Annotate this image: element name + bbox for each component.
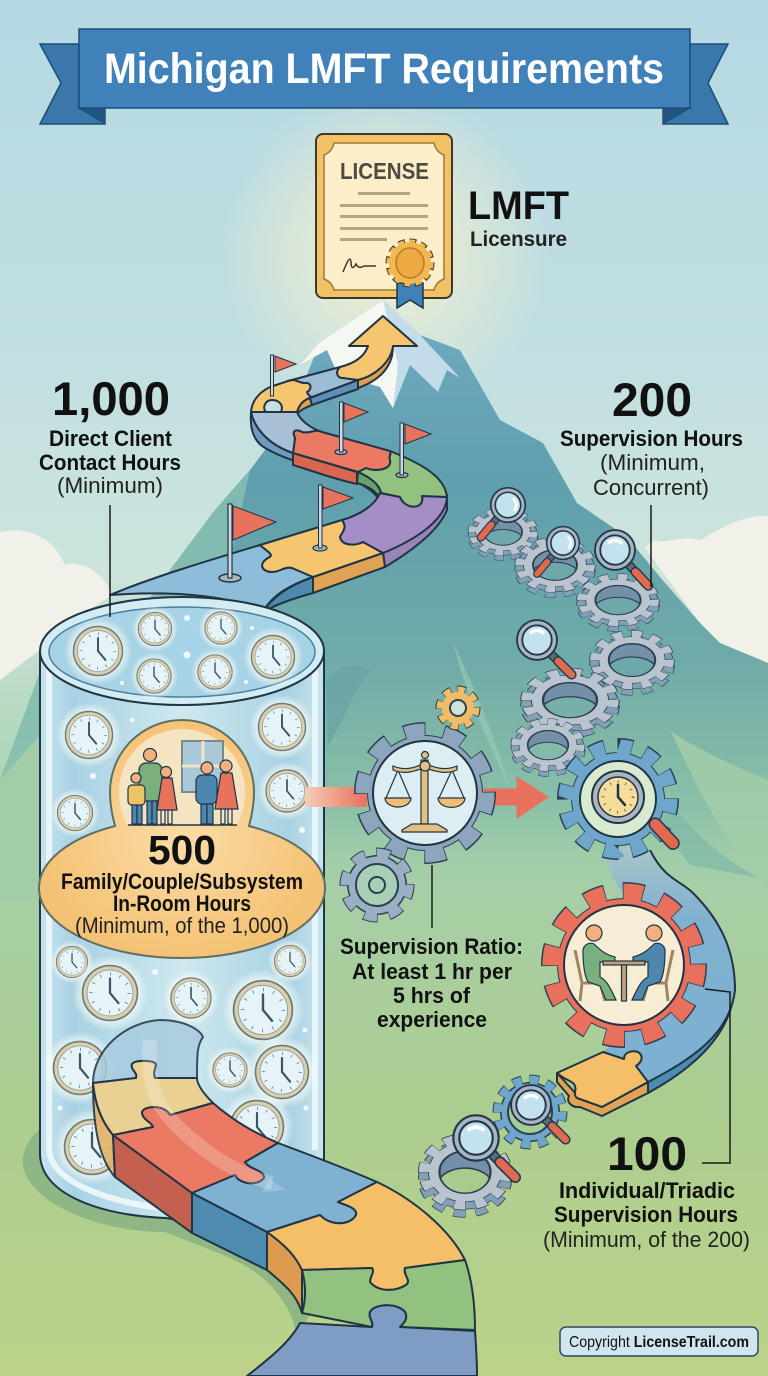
text: 1,000 direct client contact hours: Direct Client [49,426,173,451]
gear: small yellow [440,690,476,726]
icon: two people at table [575,925,673,1001]
puzzle piece: blue [192,1143,377,1232]
heading: LMFT Licensure: LMFT [468,184,569,228]
text: supervision ratio: 5 hrs of [393,983,471,1008]
side walls [93,1083,115,1177]
icon: balance scale [385,752,465,832]
gear: grey with magnifier [425,1106,535,1212]
arrow to license [337,316,417,380]
mountain [0,300,768,900]
glass cylinder of hours [40,597,324,1240]
heading: LMFT Licensure: Licensure [470,228,567,251]
text: 200 supervision hours: Concurrent) [593,475,709,500]
puzzle piece: orange right [557,1073,648,1116]
heading: LMFT Licensure [468,184,569,251]
text: 1,000 direct client contact hours: (Minimum) [57,473,163,498]
puzzle piece: blue start [110,545,313,612]
text: 200 supervision hours [560,373,743,500]
right blue path [557,846,735,1116]
text: 1,000 direct client contact hours: 1,000 [52,372,170,425]
gear: small grey [347,855,407,915]
lower puzzle path [93,1020,477,1376]
text: 500 hours: 500 [148,827,216,873]
title banner: Michigan LMFT Requirements [104,45,664,93]
text: 200 supervision hours: Supervision Hours [560,426,743,451]
icon: ribbon seal [389,242,431,308]
puzzle piece: pale blue [288,367,358,397]
puzzle piece: slate [251,412,322,453]
gear: clock magnifier [568,749,681,852]
puzzle piece: green [358,451,447,507]
text: 1,000 direct client contact hours: Contact Hours [39,450,181,475]
gear: individual supervision [554,895,694,1035]
text: 200 supervision hours: (Minimum, [600,450,705,475]
arrow: left bar into scale gear [305,787,367,807]
snow cap [300,300,460,408]
puzzle piece: red [113,1103,278,1193]
text: 1,000 direct client contact hours [39,372,181,498]
puzzle piece: green [302,1260,475,1330]
text: 100 individual triadic supervision [543,1127,750,1252]
leader lines [110,505,730,1163]
copyright badge [560,1327,758,1356]
puzzle piece: orange [260,520,383,577]
gears with magnifiers: supervision chain [465,481,669,773]
sun glow behind license [220,85,550,415]
license certificate: LICENSE [340,158,429,184]
copyright badge: Copyright LicenseTrail.com [569,1334,749,1351]
pale inner pieces [93,1020,203,1083]
arrow: to clock gear [484,777,548,818]
text: 100 individual triadic supervision: 100 [607,1127,687,1180]
panel: 500 family hours bubble [39,720,325,958]
text: 500 hours [61,827,303,938]
text: supervision ratio [340,934,523,1032]
gear: small blue with magnifier [500,1077,583,1157]
sparkles [58,615,308,1110]
text: 100 individual triadic supervision: Supervision Hours [554,1202,738,1227]
title banner [40,29,728,124]
clouds [0,516,768,680]
puzzle piece: red [293,430,391,472]
icon: family in room [119,729,245,825]
text: 500 hours: Family/Couple/Subsystem [61,869,303,894]
text: 100 individual triadic supervision: (Minimum, of the 200) [543,1227,750,1252]
puzzle piece: orange [267,1182,465,1290]
gear: scale [365,733,485,853]
arrow ghost on road [149,1040,272,1183]
text: 500 hours: In-Room Hours [113,891,251,916]
ground shadow of cylinder and road [23,1130,320,1335]
text: supervision ratio: experience [377,1007,487,1032]
upper puzzle path [110,316,447,612]
license certificate [316,134,452,308]
puzzle piece: orange bend [251,380,312,412]
clocks [43,606,319,1185]
text: 500 hours: (Minimum, of the 1,000) [75,913,289,938]
puzzle piece: slate blue [247,1305,477,1376]
text: supervision ratio: At least 1 hr per [352,959,512,984]
text: 200 supervision hours: 200 [612,373,692,426]
flags [219,355,431,582]
puzzle piece: purple [340,493,447,553]
side walls [251,412,381,505]
text: supervision ratio: Supervision Ratio: [340,934,523,959]
text: 100 individual triadic supervision: Individual/Triadic [559,1178,735,1203]
